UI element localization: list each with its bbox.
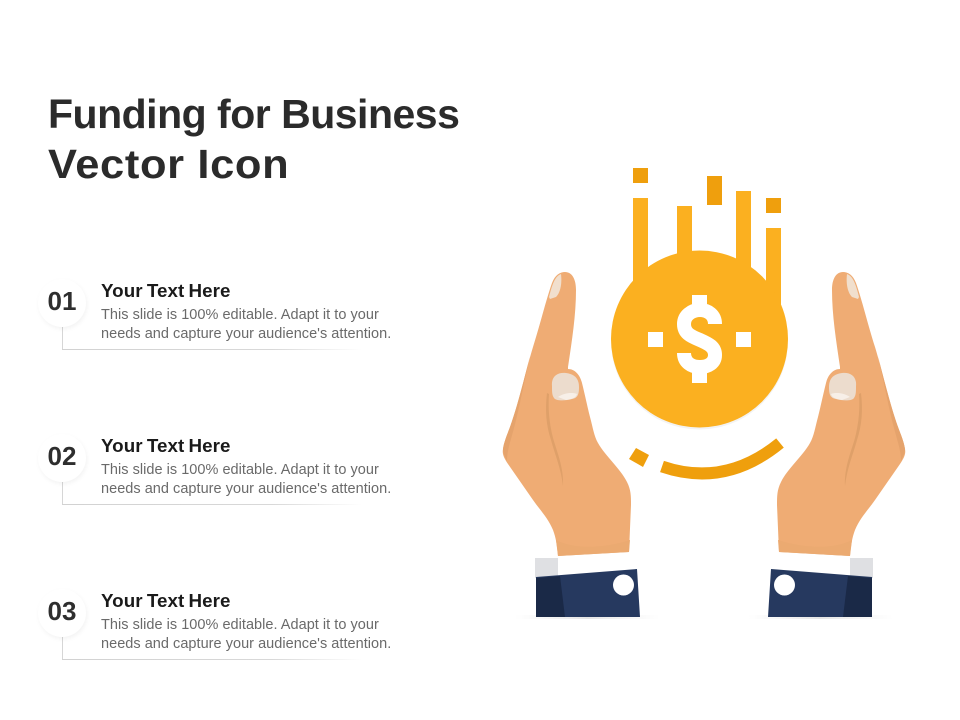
connector line 02 (62, 482, 63, 504)
body text 02: This slide is 100% editable. Adapt it to your (101, 462, 379, 478)
title: Funding for Business (48, 91, 459, 137)
body text 01: This slide is 100% editable. Adapt it to your (101, 307, 379, 323)
title (48, 91, 459, 187)
connector line 03 (62, 637, 63, 659)
body text 02: needs and capture your audience's attention. (101, 480, 391, 496)
body text 03: This slide is 100% editable. Adapt it to your (101, 617, 379, 633)
icon: coin with falling bars (611, 168, 788, 430)
connector line 01 (62, 327, 63, 349)
number badge 01 (38, 279, 86, 327)
heading 01: Your Text Here (101, 280, 231, 301)
body text 03: needs and capture your audience's attention. (101, 636, 391, 652)
body text 01: needs and capture your audience's attention. (101, 326, 391, 342)
body text 02 (101, 462, 391, 496)
title: Vector Icon (48, 141, 289, 187)
list item 03 (48, 590, 391, 660)
list item 02 (48, 435, 391, 505)
icon: right hand (748, 272, 905, 619)
list item 01 (48, 280, 391, 350)
icon: left hand (503, 272, 660, 619)
number badge 03 (38, 589, 86, 637)
number 03: 03 (48, 596, 76, 626)
body text 03 (101, 617, 391, 652)
arc under coin (629, 443, 780, 473)
number 01: 01 (48, 286, 76, 316)
icon: dollar sign (648, 295, 751, 383)
heading 02: Your Text Here (101, 435, 231, 456)
body text 01 (101, 307, 391, 342)
heading 03: Your Text Here (101, 590, 231, 611)
number 02: 02 (48, 441, 76, 471)
number badge 02 (38, 434, 86, 482)
